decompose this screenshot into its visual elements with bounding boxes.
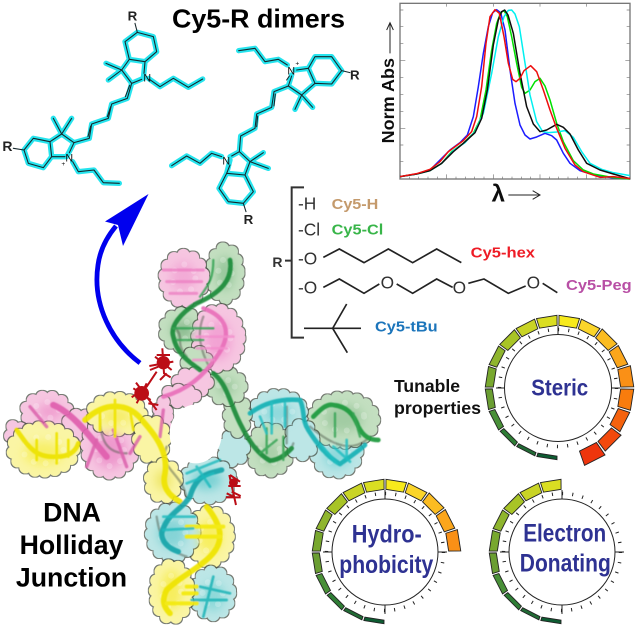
segments — [485, 315, 634, 465]
gauge: Steric — [485, 315, 634, 465]
molecule: right Cy5 structure: R — [244, 212, 254, 227]
label — [520, 519, 611, 577]
compound name: Cy5-H: Cy5-H — [332, 197, 378, 213]
label: DNA Holliday Junction: Holliday — [20, 530, 124, 560]
chart frame — [400, 3, 630, 179]
substituent: Cl: -Cl — [298, 219, 320, 239]
tick marks — [504, 494, 620, 610]
tick marks — [326, 494, 444, 610]
substituent: PEG: O — [381, 273, 394, 293]
inner circle — [509, 499, 615, 605]
molecule: left Cy5 structure: + — [61, 161, 65, 168]
surface highlights — [23, 259, 364, 608]
y-axis arrow — [387, 23, 393, 53]
tick marks — [500, 330, 616, 446]
label: Tunable properties: Tunable — [394, 376, 460, 396]
label: phobicity — [339, 551, 433, 579]
molecule: right Cy5 structure: N — [222, 156, 230, 168]
molecule: left Cy5 structure: N — [143, 73, 151, 85]
inner circle — [332, 499, 438, 605]
compound name: Cy5-tBu: Cy5-tBu — [375, 319, 438, 335]
compound name: Cy5-Cl: Cy5-Cl — [332, 223, 383, 239]
label: DNA Holliday Junction: DNA — [43, 498, 101, 528]
central junction opening — [170, 405, 222, 463]
x-axis arrow — [508, 191, 540, 199]
molecule: left Cy5 structure: R — [128, 9, 138, 24]
axis ticks — [400, 3, 630, 179]
surface lobes — [10, 248, 374, 618]
y-axis label: Norm Abs — [378, 58, 398, 143]
compound name: Cy5-hex: Cy5-hex — [471, 245, 536, 261]
illustration: DNA Holliday junction — [10, 248, 378, 618]
gauge: Hydrophobicity — [312, 479, 461, 624]
green strand — [173, 260, 292, 461]
dark groove shading — [100, 317, 370, 557]
dye: upper Cy5 dimer — [132, 348, 173, 410]
x-axis label: λ — [492, 181, 505, 208]
compound name: Cy5-Peg: Cy5-Peg — [566, 278, 632, 294]
label: DNA Holliday Junction: Junction — [16, 562, 127, 592]
label: Tunable properties — [394, 376, 481, 418]
substituent: H: -H — [298, 193, 316, 213]
label: Donating — [520, 549, 611, 577]
inner circle — [504, 334, 612, 442]
pink strand — [163, 270, 203, 293]
label — [339, 520, 433, 579]
molecule: left Cy5 structure: N — [65, 152, 73, 164]
label: Hydro- — [352, 520, 422, 548]
label: DNA Holliday Junction — [16, 498, 127, 592]
substituent: PEG: O — [453, 278, 466, 298]
title: Cy5-R dimers — [172, 4, 345, 34]
substituent: PEG — [298, 273, 557, 298]
dye: lower Cy5 dimer — [226, 475, 241, 505]
gauge: Electron Donating — [489, 479, 624, 624]
substituent: tert-butyl — [304, 304, 361, 353]
label: Tunable properties: properties — [394, 398, 481, 418]
arrow: blue curved arrow — [97, 194, 148, 363]
molecule: left Cy5 structure: R — [2, 138, 12, 154]
molecule: right Cy5 structure: + — [295, 60, 299, 67]
strand ribbons — [17, 260, 378, 617]
teal strand — [250, 400, 365, 464]
saturated colour tone inside lobes — [23, 257, 363, 611]
bracket — [285, 187, 304, 338]
yellow strand — [17, 430, 78, 457]
substituent: hexyloxy — [298, 248, 461, 268]
label: R: R — [272, 254, 282, 270]
molecule: right Cy5 structure — [172, 48, 360, 227]
segments — [489, 479, 563, 624]
substituent: PEG: O — [527, 273, 540, 293]
molecule: right Cy5 structure: N — [287, 66, 295, 78]
substituent: hexyloxy: -O — [298, 248, 317, 268]
chart: normalized absorbance spectra — [378, 3, 630, 208]
substituent: PEG: -O — [298, 278, 317, 298]
molecule: left Cy5 structure — [2, 9, 203, 183]
label: Steric — [531, 374, 588, 400]
label: Electron — [523, 519, 606, 547]
molecule: right Cy5 structure: R — [350, 67, 360, 82]
segments — [312, 479, 461, 624]
panel: R substituents — [272, 187, 632, 353]
spectrum curves — [400, 10, 630, 179]
